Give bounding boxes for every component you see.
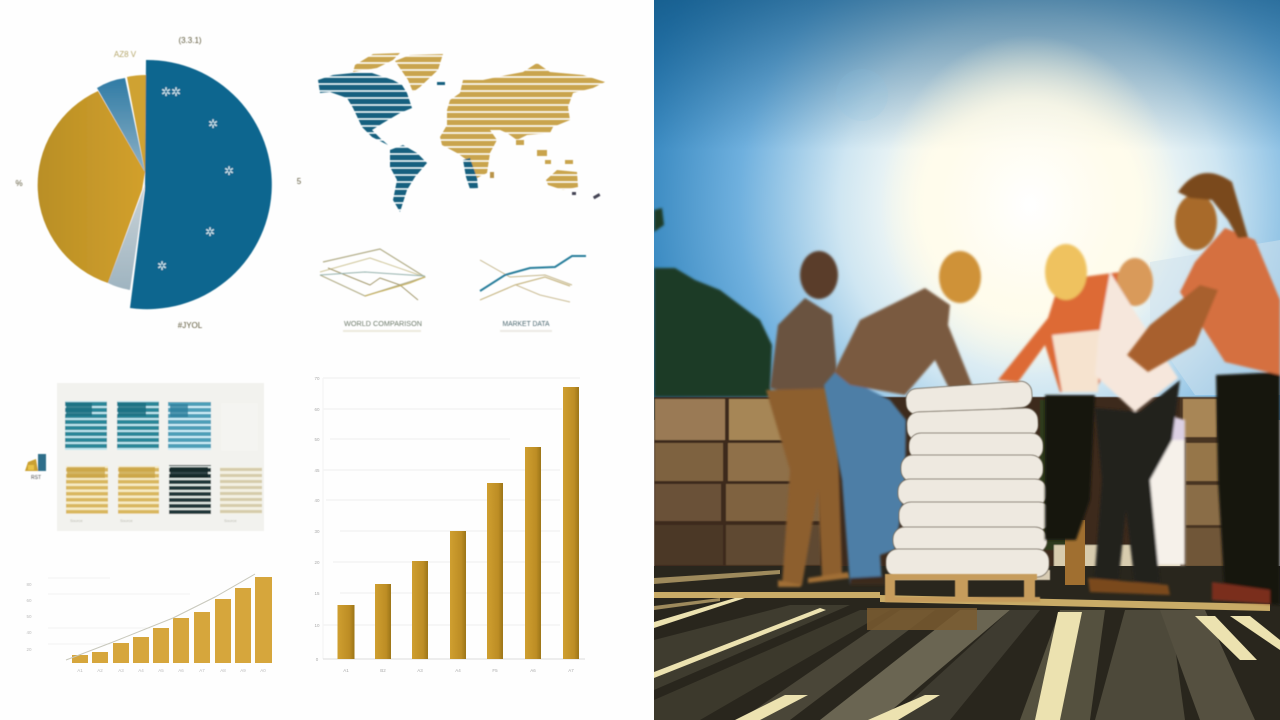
map: Australia	[546, 170, 578, 190]
large chart axis labels: A4	[455, 668, 461, 673]
small chart axis labels: A9	[240, 668, 246, 673]
fence background	[1150, 240, 1280, 395]
card captions: Source	[70, 518, 83, 523]
post	[1065, 520, 1085, 585]
large chart axis labels: 20	[314, 560, 320, 565]
small chart axis labels: A8	[220, 668, 226, 673]
small chart gridlines	[48, 578, 190, 644]
large chart axis labels: 50	[314, 437, 320, 442]
person: bending man	[824, 251, 988, 585]
sun glow	[911, 42, 1148, 337]
small bar chart	[26, 574, 272, 673]
card: blue 1	[65, 401, 107, 450]
large chart gridlines	[323, 378, 585, 659]
pie slice icons: ✲✲	[161, 85, 181, 99]
pie labels: 5	[297, 177, 302, 186]
card captions: Source	[120, 518, 133, 523]
map: islands	[437, 82, 600, 199]
small chart axis labels: 20	[26, 647, 32, 652]
card: blue 2	[117, 401, 159, 450]
map: arctic and Greenland	[353, 53, 443, 92]
pie slice icons: ✲	[157, 259, 167, 273]
card: dark 3	[169, 465, 211, 514]
pie labels: (3.3.1)	[178, 36, 202, 45]
line chart caption: right: MARKET DATA	[502, 319, 550, 328]
small chart axis labels: 80	[26, 582, 32, 587]
pie labels	[15, 36, 302, 330]
card: pale 4 bottom	[220, 467, 262, 514]
line chart caption: right	[500, 319, 552, 332]
small chart trend line	[66, 574, 255, 660]
large chart axis labels: F5	[492, 668, 498, 673]
large bar chart	[314, 376, 585, 673]
pie labels: #JYOL	[178, 321, 203, 330]
large chart axis labels: 70	[314, 376, 320, 381]
map: North America	[318, 73, 412, 145]
photo: workers stacking sacks at sunset	[654, 0, 1280, 720]
map: Eurasia and Africa	[440, 63, 605, 178]
panel: data table cards	[57, 383, 264, 531]
icon: chart badge: RST	[31, 475, 41, 481]
large chart axis labels: B2	[380, 668, 386, 673]
large chart axis labels: A7	[568, 668, 574, 673]
small chart axis labels: A6	[178, 668, 184, 673]
panel: infographic background	[0, 0, 654, 720]
pie slice: large gold	[38, 91, 145, 283]
line chart caption: left: WORLD COMPARISON	[344, 319, 422, 328]
small chart axis labels: 60	[26, 598, 32, 603]
person: right woman	[1127, 173, 1280, 605]
card captions	[70, 518, 237, 523]
small chart axis labels: 50	[26, 614, 32, 619]
small chart axis labels: A0	[260, 668, 266, 673]
person: centre helpers	[998, 244, 1185, 595]
small chart axis labels: A7	[199, 668, 205, 673]
large chart axis labels: 40	[314, 498, 320, 503]
small chart axis labels: A3	[118, 668, 124, 673]
pie slice: small gold	[127, 75, 146, 172]
card: pale 4	[221, 403, 258, 451]
small chart axis labels	[26, 582, 266, 673]
small chart axis labels: A2	[97, 668, 103, 673]
sack rows	[886, 381, 1051, 577]
large chart axis labels: A1	[343, 668, 349, 673]
pie slice icons: ✲	[208, 117, 218, 131]
card: blue 3	[168, 402, 211, 450]
tree	[654, 208, 772, 397]
pie chart	[38, 60, 272, 309]
world map	[318, 53, 605, 212]
card: yellow 1	[66, 466, 108, 514]
line chart: left	[320, 249, 425, 300]
floor	[654, 566, 1280, 720]
small chart axis labels: A1	[77, 668, 83, 673]
pie slice: gray	[108, 185, 145, 290]
small chart axis labels: 40	[26, 630, 32, 635]
pie slice icons: ✲	[205, 225, 215, 239]
large chart axis labels: A3	[417, 668, 423, 673]
pie slice: large blue	[130, 60, 272, 309]
sack stack	[886, 381, 1051, 580]
small chart axis labels: A4	[138, 668, 144, 673]
icon: chart badge	[25, 454, 46, 481]
sky	[654, 0, 1280, 420]
pie labels: %	[15, 179, 23, 188]
large chart axis labels: 60	[314, 407, 320, 412]
large chart axis labels: 10	[314, 623, 320, 628]
large chart axis labels: 30	[314, 529, 320, 534]
line chart caption: left	[343, 319, 422, 332]
map: South America	[390, 145, 427, 212]
pie slice: small blue	[97, 78, 145, 172]
crates	[654, 396, 1225, 566]
map: southern Africa	[463, 158, 478, 189]
large chart axis labels: 0	[316, 657, 319, 662]
card: yellow 2	[118, 466, 159, 514]
pallet	[885, 574, 1040, 602]
pie labels: AZ8 V	[114, 50, 137, 59]
large chart bars	[338, 387, 579, 659]
pie slice icons	[157, 85, 234, 273]
line chart: right	[480, 256, 586, 302]
small chart bars	[72, 577, 272, 663]
person: left woman	[766, 251, 850, 587]
large chart axis labels	[314, 376, 574, 673]
pie slice icons: ✲	[224, 164, 234, 178]
card captions: Source	[224, 518, 237, 523]
large chart axis labels: 15	[314, 591, 320, 596]
small chart axis labels: A5	[158, 668, 164, 673]
large chart axis labels: A6	[530, 668, 536, 673]
large chart axis labels: 45	[314, 468, 320, 473]
